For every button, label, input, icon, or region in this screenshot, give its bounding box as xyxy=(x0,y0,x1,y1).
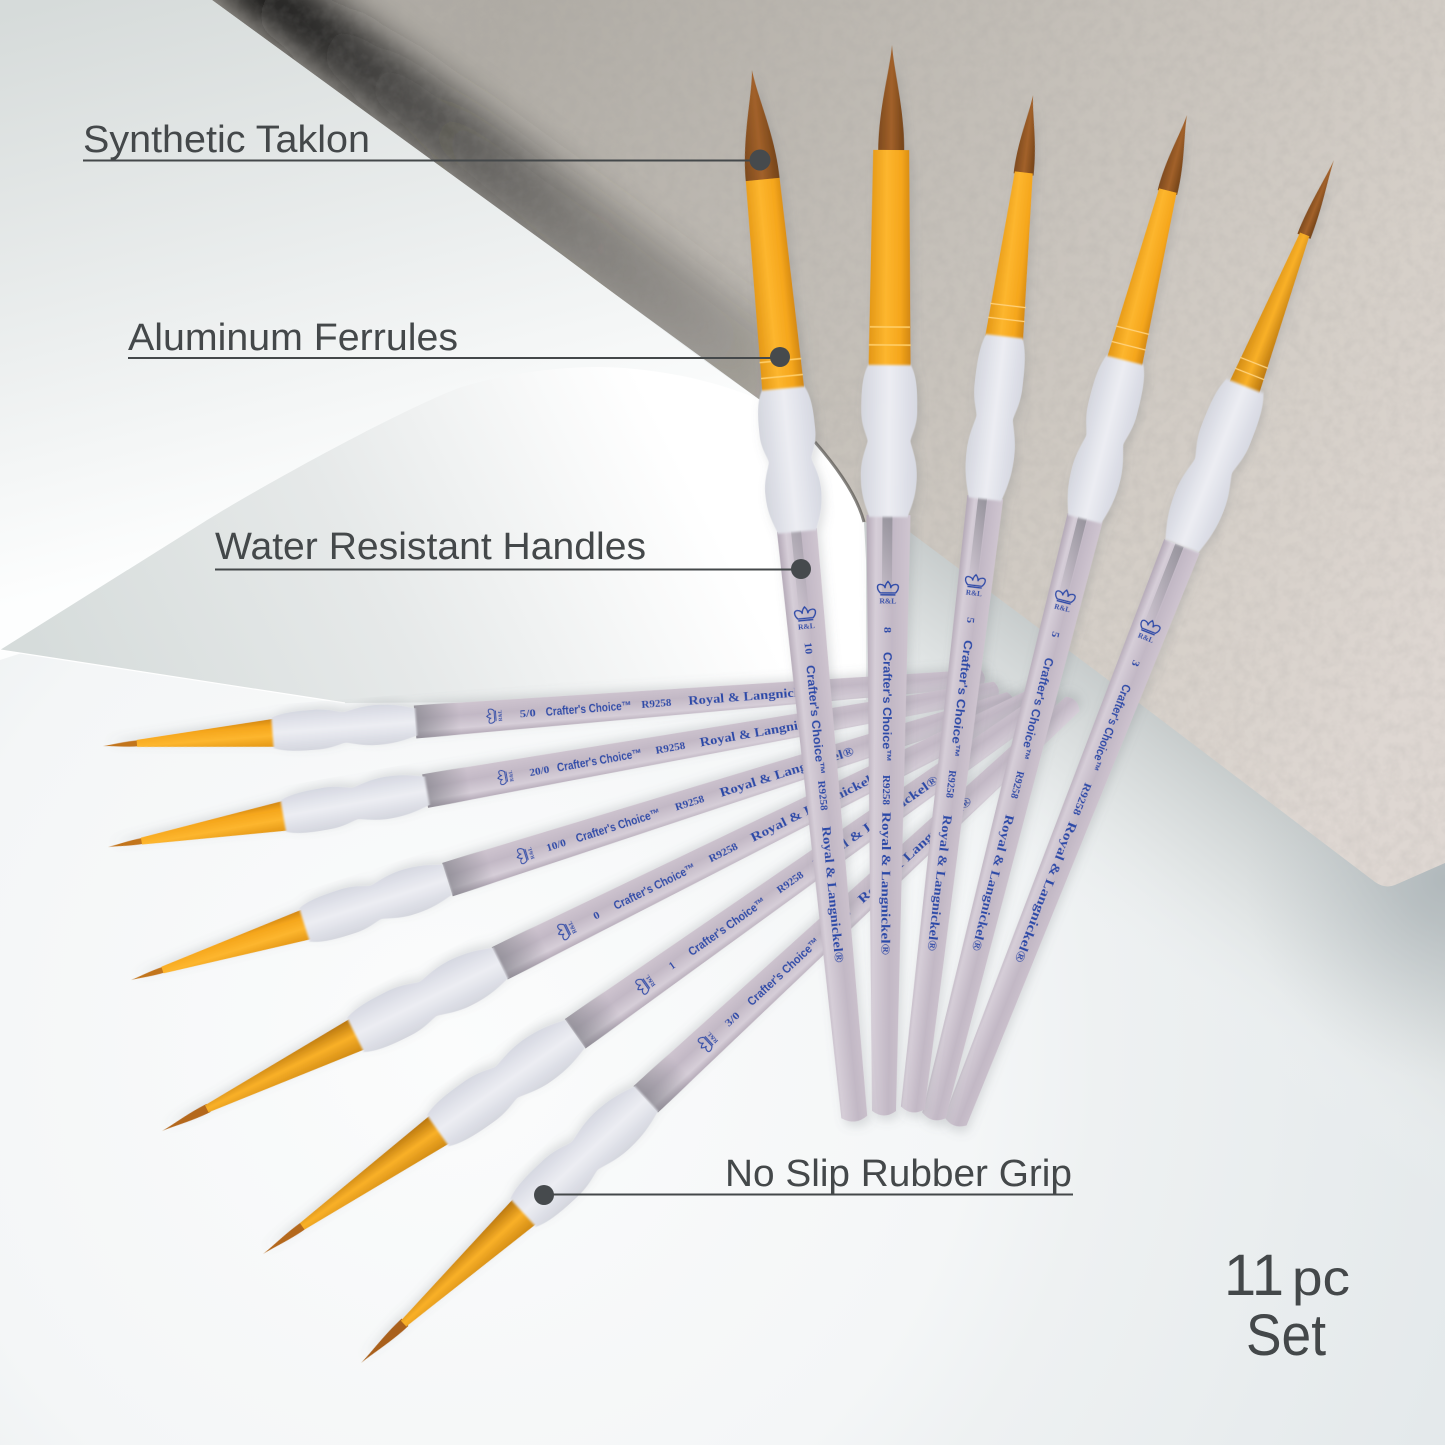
brush fan: F 3/0: Royal & Langnickel® xyxy=(855,793,975,906)
set size label: Set xyxy=(1246,1303,1326,1368)
brush upright: size 5 small: Crafter's Choice™ xyxy=(947,639,975,758)
brush fan: E size 1: Royal & Langnickel® xyxy=(810,772,941,871)
brush upright: size 3: Royal & Langnickel® xyxy=(1011,820,1080,965)
callout: No Slip Rubber Grip: No Slip Rubber Grip xyxy=(725,1153,1072,1195)
brush fan: E size 1: R&L xyxy=(645,973,657,987)
brush upright: size 8: 8 xyxy=(881,627,892,633)
panel: upper white sheet xyxy=(0,0,760,660)
panel: curled front sheet xyxy=(0,367,866,703)
brush upright: size 5: Crafter's Choice™ xyxy=(1017,656,1056,761)
brush fan: E size 1: R9258 xyxy=(775,870,806,896)
brush upright: size 5 small: R9258 xyxy=(943,769,957,799)
brush fan: C 10/0: 10/0 xyxy=(545,838,568,854)
brush fan: F 3/0: 3/0 xyxy=(723,1010,743,1029)
brush fan: C 10/0: R9258 xyxy=(674,794,706,814)
set size label xyxy=(1224,1243,1350,1368)
brush fan: C 10/0: Crafter's Choice™ xyxy=(574,806,662,845)
brush upright: size 8 xyxy=(856,45,920,1116)
callout: Water Resistant Handles: Water Resistant Handles xyxy=(215,526,646,568)
brush fan: F 3/0: R&L xyxy=(706,1030,720,1044)
brush upright: size 10: R&L xyxy=(798,621,815,632)
background: shadow under beige paper xyxy=(864,515,1445,1200)
brush fan: B 20/0: R9258 xyxy=(655,741,686,757)
front sheet lower edge highlight xyxy=(0,650,345,703)
brush upright: size 3: 3 xyxy=(1129,658,1141,668)
brush fan: D size 0 xyxy=(151,673,1050,1153)
brush upright: size 8: Royal & Langnickel® xyxy=(878,812,894,955)
brush fan: A 5/0: 5/0 xyxy=(519,708,536,720)
callout: Water Resistant Handles xyxy=(215,526,811,579)
brush upright: size 8: Crafter's Choice™ xyxy=(880,652,894,762)
brush fan: F 3/0: Crafter's Choice™ xyxy=(744,935,823,1009)
brush fan: D size 0: Crafter's Choice™ xyxy=(611,860,698,913)
brush upright: size 10: Crafter's Choice™ xyxy=(803,664,828,775)
brush upright: size 8: R&L xyxy=(879,596,896,605)
brush upright: size 3: R9258 xyxy=(1070,781,1093,817)
brush fan: B 20/0: R&L xyxy=(508,769,516,782)
brush upright: size 3: Crafter's Choice™ xyxy=(1087,682,1134,773)
brush fan: B 20/0 xyxy=(104,669,1002,868)
brush upright: size 5 xyxy=(909,109,1211,1126)
brush fan: D size 0: 0 xyxy=(592,910,602,923)
brush upright: size 10: R9258 xyxy=(815,780,829,811)
brush fan: C 10/0 xyxy=(124,678,1021,1002)
brush upright: size 5 small: 5 xyxy=(964,617,975,624)
brush upright: size 5: Royal & Langnickel® xyxy=(969,813,1018,953)
brush upright: size 10: 10 xyxy=(801,642,814,655)
brush fan: B 20/0: Royal & Langnickel® xyxy=(698,711,834,750)
set size label: 11 xyxy=(1224,1243,1284,1308)
brush upright: size 5: R9258 xyxy=(1008,770,1025,800)
brush upright: size 5 small: Royal & Langnickel® xyxy=(924,814,955,952)
brush fan: A 5/0 xyxy=(101,658,986,766)
panel: beige paper sheet xyxy=(190,0,1445,900)
brush upright: size 5: R&L xyxy=(1053,602,1071,614)
callout: Aluminum Ferrules xyxy=(128,317,790,367)
brush upright: size 8: R9258 xyxy=(880,775,891,805)
callout: No Slip Rubber Grip xyxy=(534,1153,1073,1205)
brush upright: size 10: Royal & Langnickel® xyxy=(819,826,847,964)
brush fan: D size 0: Royal & Langnickel® xyxy=(748,767,885,845)
brush fan: F 3/0: R9258 xyxy=(824,908,853,936)
brush upright: size 5: 5 xyxy=(1048,630,1061,639)
brush fan: A 5/0: Crafter's Choice™ xyxy=(545,698,632,719)
brush fan: B 20/0: 20/0 xyxy=(529,765,550,779)
callout: Synthetic Taklon: Synthetic Taklon xyxy=(83,119,370,161)
brush upright: size 5 small xyxy=(888,92,1057,1115)
brush upright: size 5 small: R&L xyxy=(965,588,982,598)
callout: Aluminum Ferrules: Aluminum Ferrules xyxy=(128,317,458,359)
brush fan: B 20/0: Crafter's Choice™ xyxy=(556,746,643,775)
brush fan: E size 1: 1 xyxy=(667,960,678,972)
brush fan: F 3/0 xyxy=(344,683,1093,1381)
brush upright: size 3: R&L xyxy=(1137,631,1155,645)
brush fan: D size 0: R9258 xyxy=(707,842,740,865)
brush fan: D size 0: R&L xyxy=(567,920,579,934)
brush upright: size 10 xyxy=(724,67,883,1124)
set size label: pc xyxy=(1292,1250,1350,1306)
curl shadow edge xyxy=(815,442,864,522)
brush fan: C 10/0: R&L xyxy=(527,846,536,860)
brush fan: A 5/0: R&L xyxy=(497,709,504,721)
brush fan: E size 1 xyxy=(249,676,1068,1274)
brush upright: size 3 xyxy=(930,150,1358,1135)
brush fan: E size 1: Crafter's Choice™ xyxy=(686,894,769,959)
brush fan: C 10/0: Royal & Langnickel® xyxy=(718,743,856,800)
brush fan: A 5/0: R9258 xyxy=(641,698,672,711)
brush fan: A 5/0: Royal & Langnickel® xyxy=(688,683,824,708)
callout: Synthetic Taklon xyxy=(83,119,770,170)
